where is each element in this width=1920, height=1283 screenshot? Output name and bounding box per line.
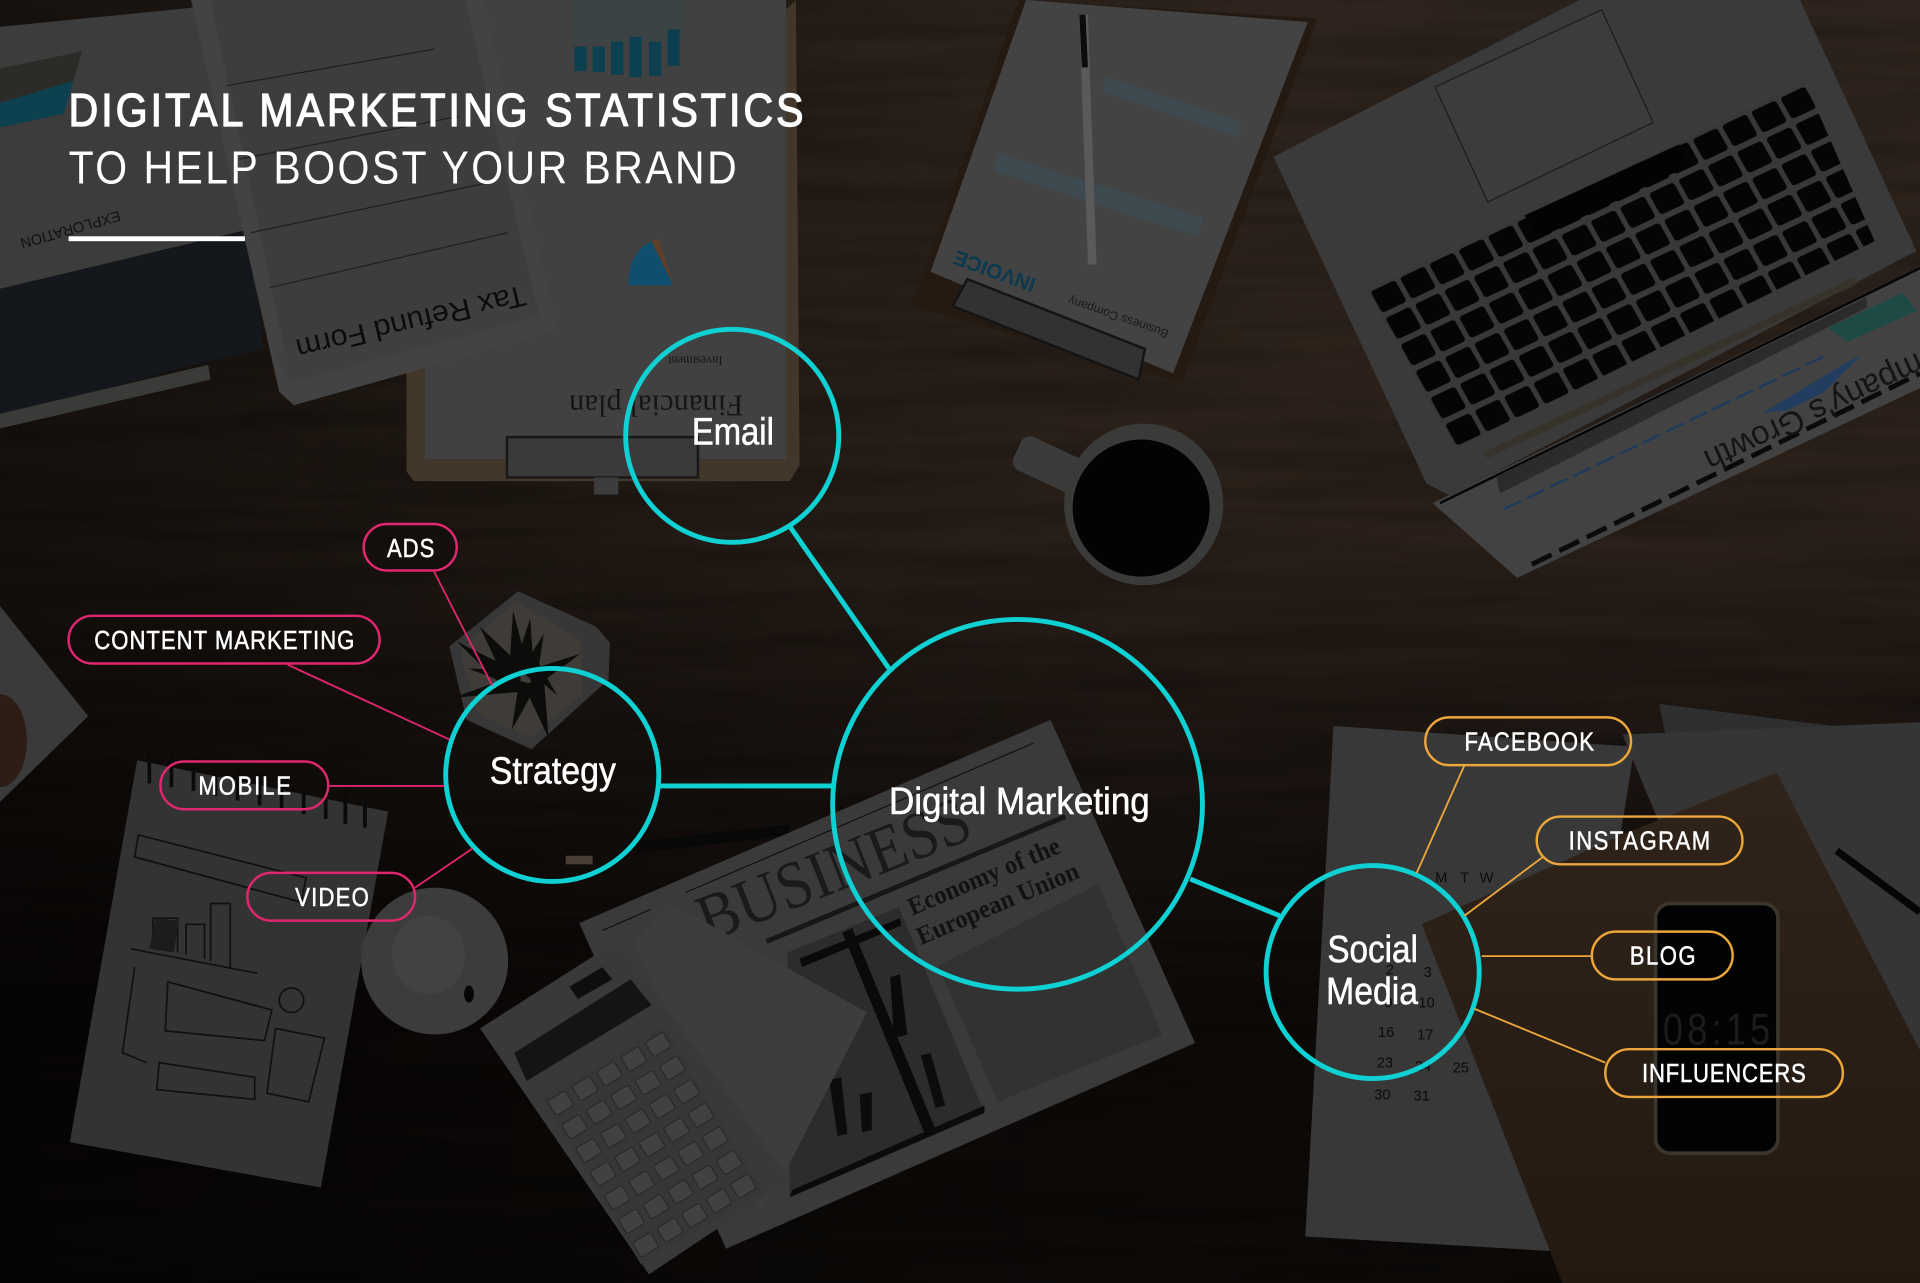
background: right papers: 10: [1418, 996, 1435, 1012]
tag: instagram: [1464, 817, 1742, 916]
background: invoice clipboard: INVOICE: [950, 245, 1039, 296]
background: newspaper: Economy of the: [903, 831, 1065, 921]
background: right papers: 25: [1453, 1060, 1469, 1076]
node: digital marketing: Digital Marketing: [889, 781, 1150, 823]
background: pencil: [1837, 851, 1920, 912]
background: right papers: 17: [1417, 1027, 1433, 1043]
tag: video: VIDEO: [295, 883, 369, 912]
background: newspaper: European Union: [912, 856, 1083, 951]
tag: blog: [1482, 932, 1733, 979]
background: newspaper: BUSINESS: [686, 781, 981, 957]
background: tablet with tax refund form: Tax Refund Form: [293, 278, 529, 365]
node: social media: Media: [1326, 971, 1419, 1013]
title line 2: TO HELP BOOST YOUR BRAND: [69, 142, 737, 194]
background: plant pot: [449, 591, 610, 749]
tag: mobile: MOBILE: [198, 772, 291, 801]
background: notebook with sketches: [70, 749, 388, 1188]
title: [69, 85, 803, 194]
node: social media: [1266, 866, 1479, 1079]
background: magazine: [0, 7, 263, 428]
tag: facebook: FACEBOOK: [1464, 728, 1594, 757]
node: strategy: Strategy: [490, 751, 616, 793]
connector: digital marketing to social media: [1190, 879, 1280, 916]
background: left hand object: [0, 606, 88, 802]
background: right papers: 9: [1384, 996, 1393, 1012]
background: invoice clipboard: Business Company: [1065, 293, 1170, 341]
strategy tags: [69, 524, 492, 921]
node: digital marketing: [833, 619, 1202, 989]
tag: blog: BLOG: [1630, 942, 1696, 971]
tag: content marketing: [69, 616, 449, 739]
tag: instagram: INSTAGRAM: [1569, 827, 1710, 856]
tag: ads: [364, 524, 492, 686]
background: right papers: 2: [1386, 962, 1394, 978]
background: right papers: 31: [1413, 1089, 1430, 1105]
node: strategy: [446, 668, 659, 881]
background: invoice clipboard: [912, 0, 1318, 382]
background: coffee cup: [1010, 424, 1223, 585]
background: phone: [1656, 903, 1778, 1153]
title line 1: DIGITAL MARKETING STATISTICS: [69, 85, 803, 137]
tag: ads: ADS: [387, 535, 434, 563]
title underline: [69, 236, 245, 241]
connector: strategy to digital marketing: [659, 784, 833, 788]
tag: influencers: [1474, 1009, 1843, 1097]
background: tablet with tax refund form: [191, 0, 557, 405]
node: email: Email: [692, 411, 774, 453]
background: calculator: [480, 940, 790, 1274]
background: right papers: 3: [1424, 965, 1432, 981]
background: newspaper: [579, 720, 1195, 1249]
background: clipboard with financial plan: [407, 0, 800, 495]
connector: email to digital marketing: [790, 526, 889, 668]
social media tags: [1417, 717, 1843, 1097]
tag: influencers: INFLUENCERS: [1642, 1060, 1806, 1089]
background: brown folder: [1422, 772, 1920, 1283]
background: laptop: [1273, 0, 1920, 578]
node: social media: Social: [1327, 929, 1418, 971]
background: right papers: M: [1435, 871, 1447, 887]
background: right papers: 16: [1378, 1025, 1394, 1041]
background: right papers: [1305, 704, 1920, 1251]
background: phone: 08:15: [1663, 1005, 1770, 1054]
background: pen: [566, 830, 790, 864]
background: right papers: T: [1460, 871, 1469, 887]
background: clipboard with financial plan: Investment: [667, 353, 722, 367]
tag: facebook: [1417, 717, 1631, 873]
node: email: [626, 329, 839, 542]
background: clipboard with financial plan: Financial plan: [569, 388, 743, 422]
background: magazine: EXPLORATION: [18, 207, 122, 251]
background: cup lid: [361, 888, 508, 1034]
background: right papers: 24: [1415, 1059, 1431, 1075]
tag: content marketing: CONTENT MARKETING: [94, 626, 354, 655]
background: white folded paper: [633, 902, 867, 1212]
background: right papers: W: [1480, 871, 1494, 887]
tag: video: [247, 848, 473, 921]
background: right papers: 30: [1374, 1087, 1391, 1103]
tag: mobile: [160, 761, 444, 809]
background: right papers: 23: [1377, 1056, 1393, 1072]
